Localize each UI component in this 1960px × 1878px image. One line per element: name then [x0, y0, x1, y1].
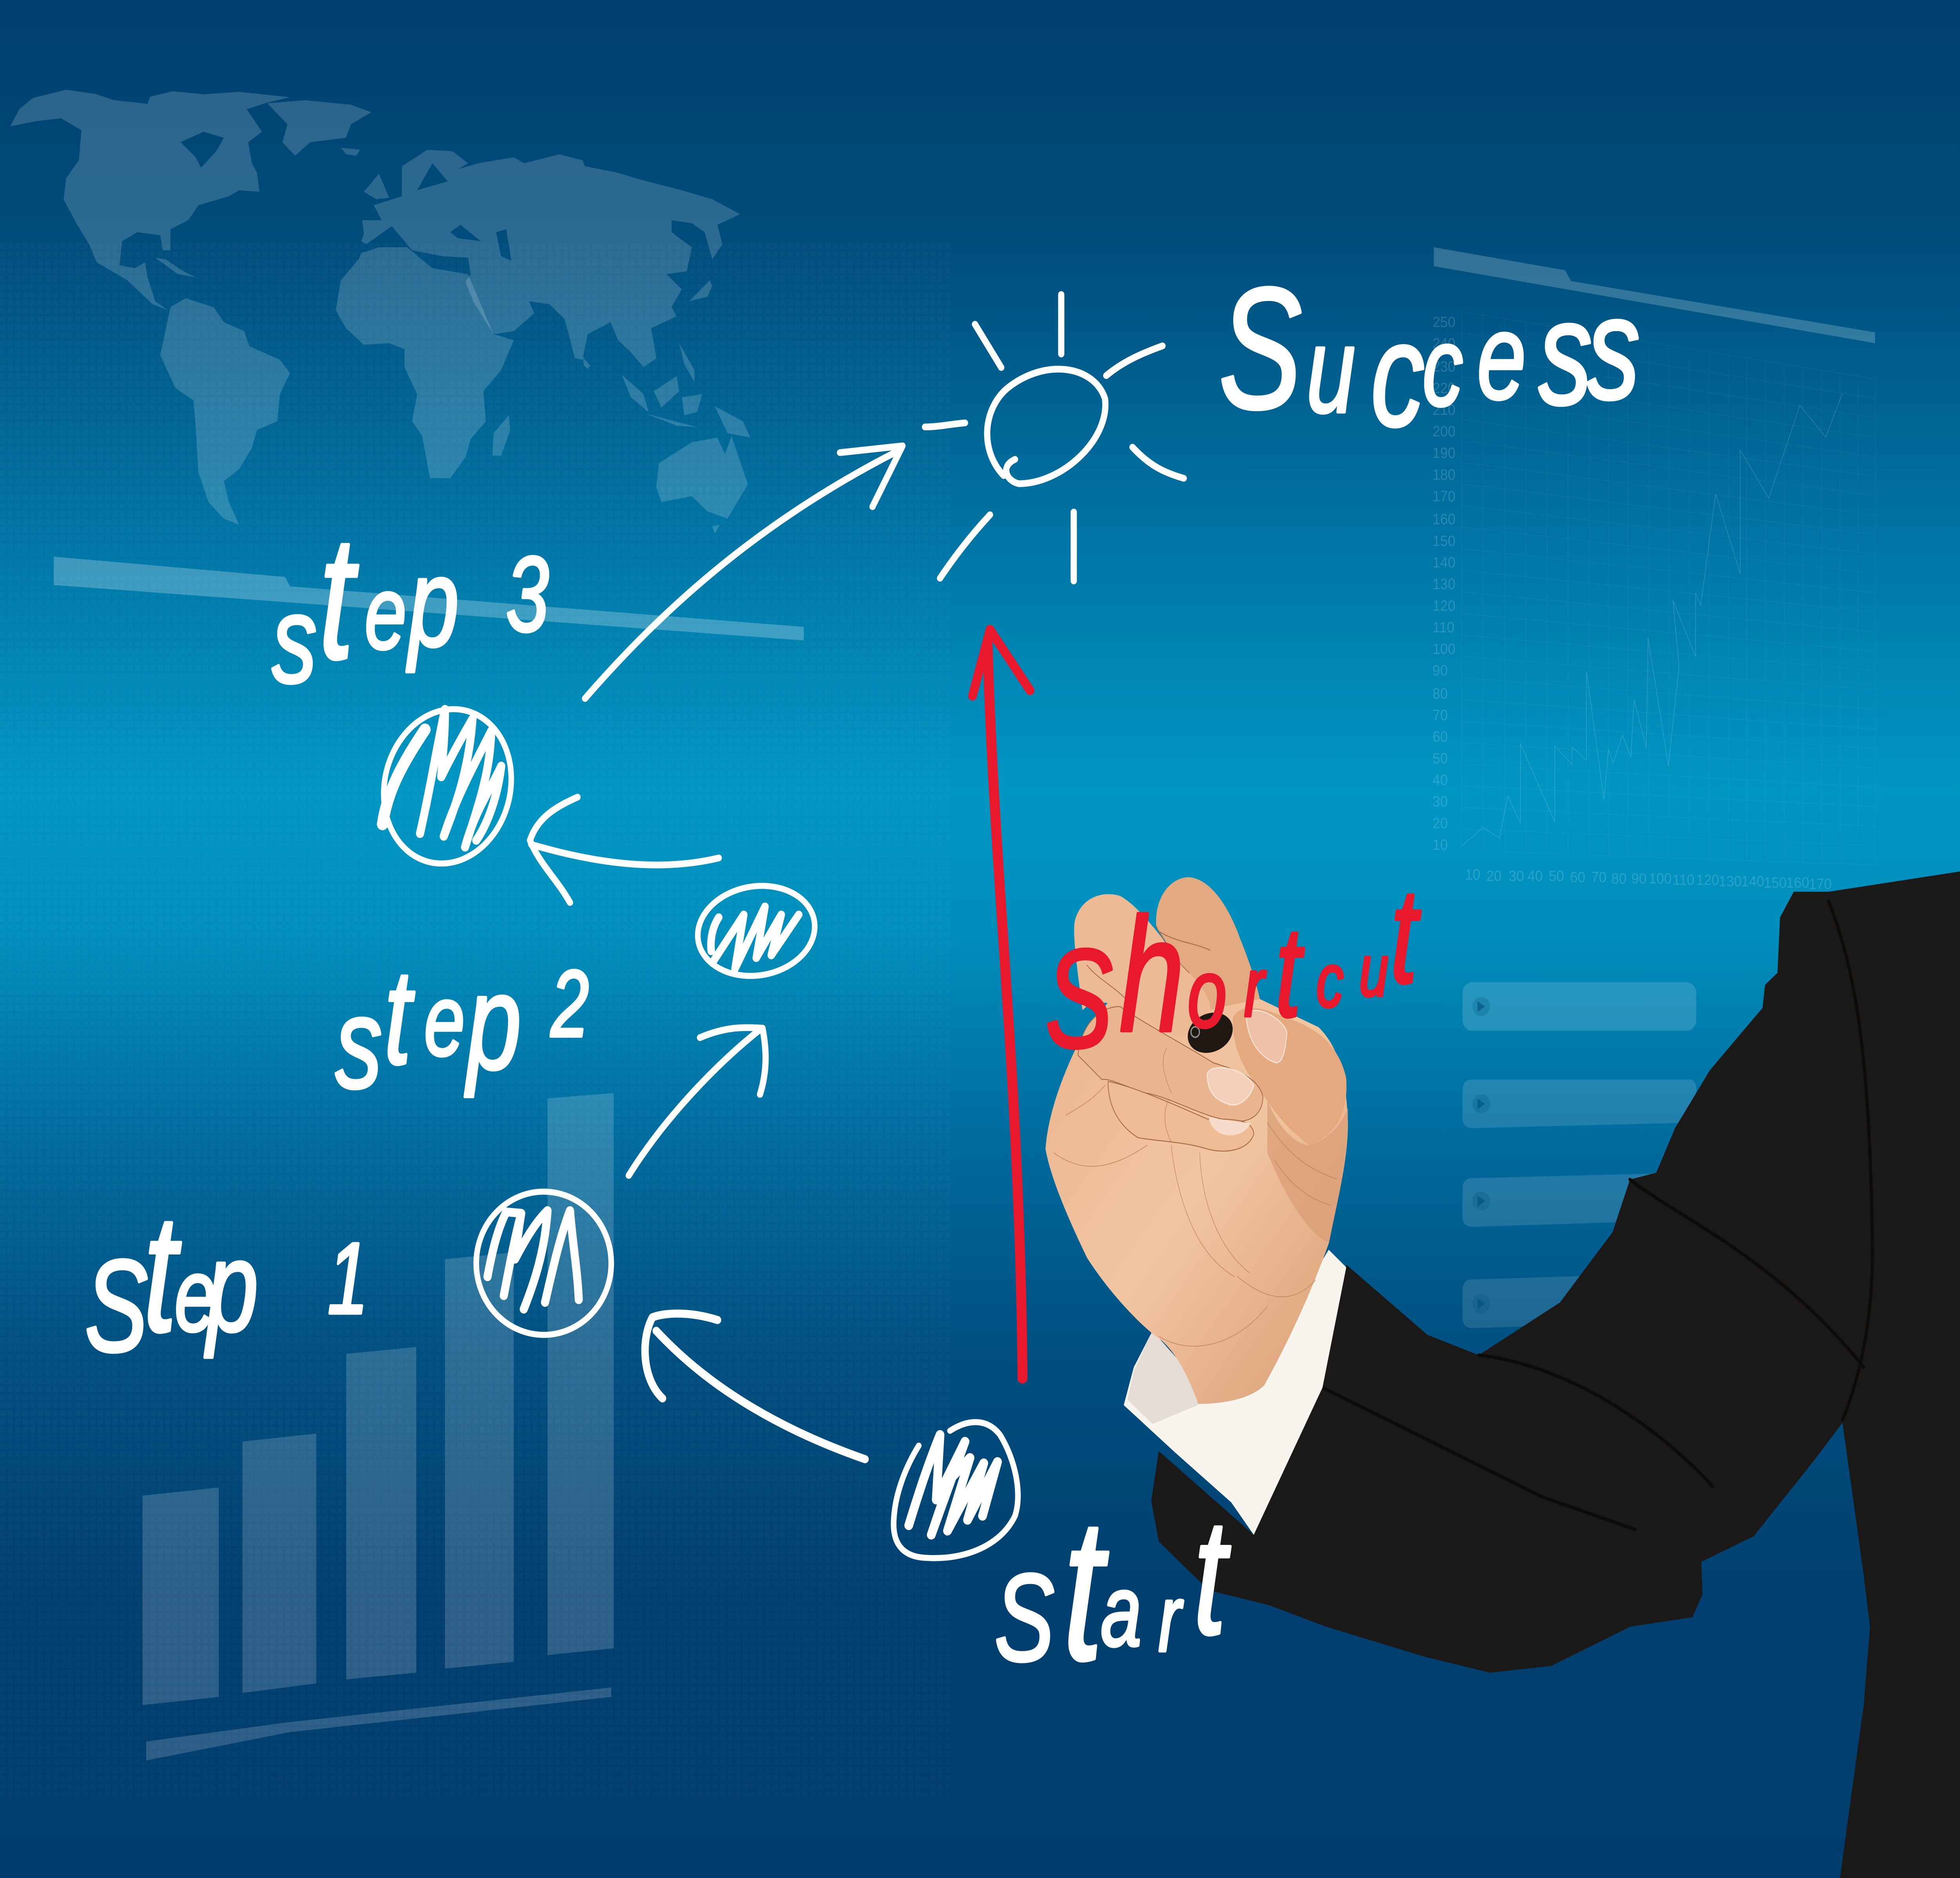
red shortcut arrow — [973, 630, 1030, 1378]
x axis labels: 10 — [1465, 866, 1480, 883]
marker: step 2 — [692, 878, 820, 984]
y axis labels: 160 — [1432, 511, 1455, 528]
label: Success: S — [1219, 252, 1302, 445]
label: Shortcut: h — [1119, 885, 1184, 1066]
y axis labels: 80 — [1432, 685, 1448, 702]
thumb base shading — [1267, 1100, 1348, 1243]
finger creases — [1087, 926, 1210, 1003]
label: Start: t — [1063, 1476, 1109, 1702]
x axis labels: 130 — [1719, 873, 1742, 890]
arrow: step 1 to step 2 — [629, 1028, 766, 1175]
y axis labels: 200 — [1432, 423, 1455, 440]
label: Success: s — [1587, 266, 1640, 430]
marker: step 1 — [476, 1192, 611, 1335]
label: step 2: e — [424, 964, 465, 1077]
bar 2 — [243, 1434, 316, 1693]
label: Step 1: e — [174, 1237, 216, 1353]
menu item 1 — [1463, 982, 1696, 1031]
label: Shortcut: o — [1187, 939, 1227, 1048]
left header bar — [54, 557, 804, 640]
menu item 3 — [1463, 1173, 1696, 1227]
label: step 3: 3 — [506, 535, 549, 654]
y axis labels — [1432, 314, 1455, 853]
y axis labels: 240 — [1432, 335, 1455, 352]
label: Success: u — [1307, 303, 1355, 438]
x axis labels: 100 — [1649, 870, 1672, 887]
map: Eurasia — [361, 150, 740, 367]
map: Iceland — [341, 148, 360, 156]
arrow: start to step 1 — [645, 1314, 865, 1459]
label: Shortcut: u — [1359, 930, 1388, 1012]
chart line — [1462, 394, 1842, 846]
hand holding pen — [1045, 877, 1348, 1404]
y axis labels: 10 — [1432, 836, 1448, 853]
label: Step 1: S — [85, 1233, 148, 1379]
bar chart — [143, 1093, 614, 1760]
knuckle lines — [1066, 1048, 1171, 1142]
y axis labels: 190 — [1432, 444, 1455, 461]
arrow head — [973, 630, 1030, 696]
x axis labels: 80 — [1611, 870, 1626, 887]
x axis labels: 20 — [1486, 867, 1501, 884]
arm in suit jacket — [1151, 872, 1960, 1878]
arrow: step 3 to success — [585, 446, 902, 698]
map: Africa — [336, 247, 514, 478]
y axis labels: 250 — [1432, 314, 1455, 330]
index finger — [1074, 894, 1210, 1037]
x axis labels: 40 — [1528, 867, 1543, 884]
sun circle — [987, 369, 1105, 484]
label: Success: e — [1477, 289, 1526, 425]
sun rays — [925, 295, 1184, 581]
label: step 2: s — [336, 971, 382, 1115]
label: step 3: e — [365, 555, 407, 671]
map: South East Asian islands — [622, 343, 750, 438]
map: Caribbean — [155, 258, 196, 277]
x axis labels: 160 — [1786, 874, 1809, 891]
map: Madagascar — [492, 415, 510, 456]
y axis labels: 30 — [1432, 793, 1448, 810]
map: Greenland — [267, 100, 371, 156]
y axis labels: 230 — [1432, 358, 1455, 375]
thumb — [1233, 1008, 1347, 1145]
label: step 3: t — [319, 499, 358, 695]
y axis labels: 100 — [1432, 640, 1455, 657]
ring finger — [1078, 1006, 1263, 1121]
label: Start: r — [1158, 1566, 1183, 1671]
little finger nail — [1209, 1117, 1251, 1135]
label: Start: a — [1101, 1554, 1142, 1667]
arrow shaft — [987, 642, 1022, 1378]
arrow: step 2 to step 3 — [530, 797, 719, 903]
label: Shortcut: r — [1244, 941, 1267, 1034]
y axis labels: 150 — [1432, 533, 1455, 549]
success sun — [925, 295, 1184, 581]
y axis labels: 20 — [1432, 815, 1448, 832]
label: Step 1: t — [143, 1179, 181, 1366]
jacket seams and folds — [1323, 901, 1873, 1530]
thumb nail — [1246, 1011, 1287, 1063]
label: Shortcut: c — [1316, 938, 1343, 1023]
map: North America — [10, 90, 290, 310]
palm — [1045, 973, 1348, 1404]
x axis labels: 140 — [1741, 873, 1764, 890]
top right header bar — [1434, 247, 1875, 343]
x axis labels: 50 — [1549, 867, 1564, 884]
label: step 2: p — [464, 946, 521, 1098]
label: Step 1: p — [204, 1215, 258, 1359]
x axis labels: 110 — [1673, 872, 1694, 888]
label: Step 1: 1 — [328, 1222, 368, 1335]
chart grid — [1462, 312, 1876, 865]
menu item 2 — [1463, 1079, 1696, 1128]
map: Sri Lanka — [583, 357, 590, 369]
x axis labels: 70 — [1591, 869, 1606, 886]
map: South America — [160, 298, 290, 525]
marker: start — [894, 1422, 1018, 1558]
y axis labels: 130 — [1432, 576, 1455, 592]
pen — [1184, 1007, 1236, 1059]
bar 5 — [548, 1093, 614, 1655]
ring finger nail — [1207, 1068, 1254, 1105]
background dot texture — [0, 243, 950, 1797]
y axis labels: 170 — [1432, 488, 1455, 504]
label: Success: c — [1371, 292, 1425, 457]
y axis labels: 70 — [1432, 707, 1448, 723]
little finger — [1108, 1082, 1254, 1151]
y axis labels: 180 — [1432, 466, 1455, 483]
x axis labels: 150 — [1764, 874, 1787, 891]
label: Success: c — [1423, 304, 1463, 429]
x axis labels: 170 — [1809, 876, 1832, 892]
bar 3 — [346, 1347, 416, 1679]
x axis labels: 30 — [1509, 867, 1524, 884]
bar 1 — [143, 1488, 219, 1705]
y axis labels: 140 — [1432, 554, 1455, 571]
label: Shortcut: t — [1275, 899, 1304, 1043]
x axis labels — [1465, 866, 1832, 892]
label: Success: s — [1539, 270, 1592, 436]
y axis labels: 210 — [1432, 401, 1455, 418]
marker: step 3 — [364, 690, 531, 883]
world map — [10, 90, 750, 534]
y axis labels: 110 — [1432, 619, 1454, 636]
menu panels — [1463, 982, 1696, 1328]
x axis labels: 90 — [1631, 870, 1646, 887]
label: Shortcut: t — [1390, 860, 1421, 1011]
menu item 4 — [1463, 1273, 1696, 1328]
label: step 3: s — [272, 570, 317, 709]
label: Start: t — [1193, 1484, 1230, 1668]
label: Start: S — [995, 1548, 1054, 1687]
y axis labels: 40 — [1432, 772, 1448, 788]
middle finger — [1156, 877, 1260, 1010]
label: step 2: t — [384, 941, 415, 1092]
y axis labels: 50 — [1432, 750, 1448, 767]
y axis labels: 90 — [1432, 662, 1448, 679]
map: Australia — [656, 436, 748, 534]
bar chart baseline — [146, 1688, 611, 1760]
shirt cuff — [1124, 1250, 1346, 1535]
label: Shortcut: S — [1045, 920, 1113, 1077]
x axis labels: 120 — [1696, 872, 1719, 888]
bar 4 — [445, 1253, 514, 1669]
label: step 3: p — [406, 533, 459, 673]
x axis labels: 60 — [1570, 869, 1585, 886]
palm creases — [1054, 1123, 1336, 1346]
map: Japan — [690, 268, 712, 301]
y axis labels: 220 — [1432, 380, 1455, 397]
y axis labels: 120 — [1432, 597, 1455, 614]
inner sleeve shadow — [1127, 1331, 1206, 1424]
line chart — [1432, 312, 1876, 892]
map: United Kingdom — [364, 174, 389, 199]
label: step 2: 2 — [550, 951, 589, 1057]
y axis labels: 60 — [1432, 728, 1448, 745]
